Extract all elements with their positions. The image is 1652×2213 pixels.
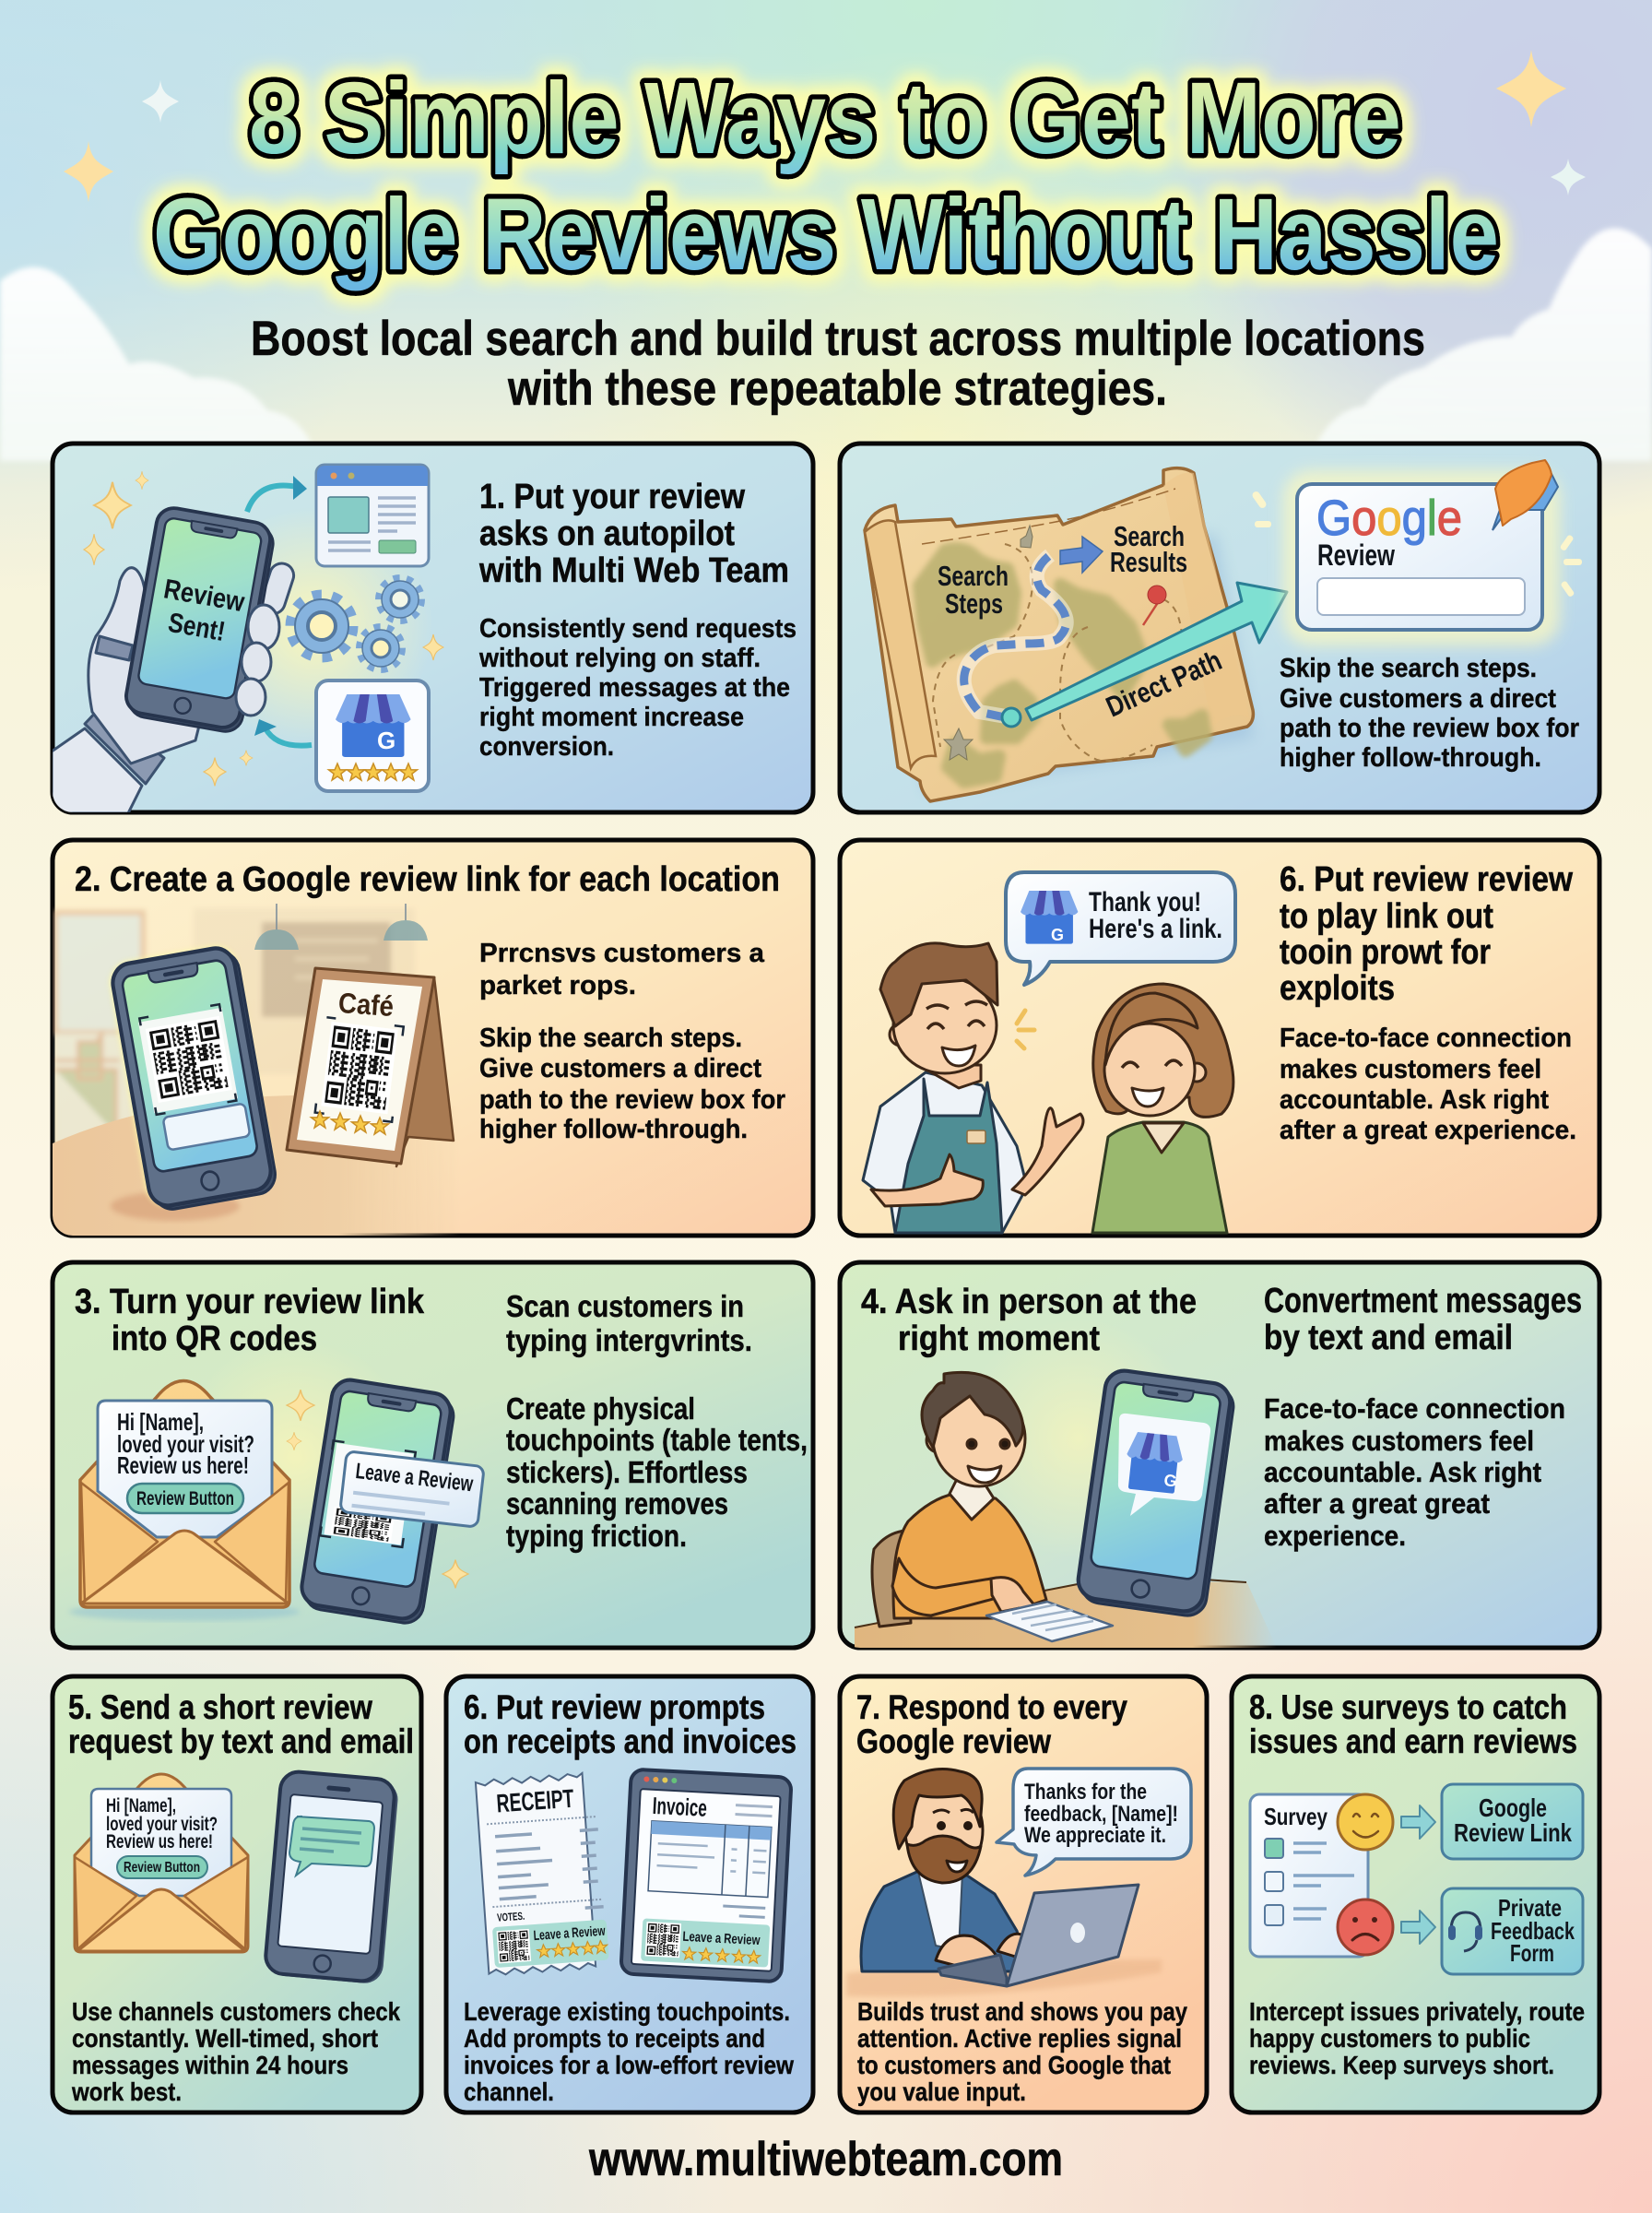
illustration: robot hand with phone, gears and profile cards <box>52 465 443 813</box>
heading: with Multi Web Team <box>478 551 789 590</box>
panel background <box>840 1676 1207 2112</box>
map path dashed lines <box>933 544 1182 761</box>
panel: 8 surveys <box>1232 1676 1599 2112</box>
heading: 4. Ask in person at the <box>861 1283 1197 1321</box>
subtitle: Boost local search and build trust across multiple locations <box>251 312 1425 366</box>
panel background <box>446 1676 813 2112</box>
body text: Builds trust and shows you pay <box>857 1997 1187 2026</box>
body text: Skip the search steps. <box>479 1024 742 1053</box>
subtitle: with these repeatable strategies. <box>507 361 1167 416</box>
illustration: treasure map <box>865 468 1254 801</box>
illustration: email envelope <box>69 1381 300 1621</box>
panel background <box>53 444 813 812</box>
body text: Prrcnsvs customers a <box>479 939 765 968</box>
body text: Create physical <box>506 1391 695 1426</box>
icon: business profile card: G <box>377 727 395 754</box>
description: experience. <box>1264 1520 1406 1552</box>
card: google review: Google <box>1316 491 1462 546</box>
body text: channel. <box>464 2077 554 2106</box>
body text: attention. Active replies signal <box>857 2024 1182 2053</box>
body text: right moment increase <box>479 703 744 732</box>
body text: Consistently send requests <box>479 614 796 644</box>
icon: sparkles <box>287 1390 468 1588</box>
speech bubble: We appreciate it. <box>1024 1823 1166 1848</box>
illustration: envelope: loved your visit? <box>106 1814 218 1835</box>
illustration: receipt <box>476 1772 609 1976</box>
panel background <box>53 840 813 1236</box>
icon: sad face <box>1338 1899 1393 1955</box>
box: private feedback form <box>1442 1888 1583 1974</box>
body text: Triggered messages at the <box>479 673 790 703</box>
speech bubble: Thanks for the <box>1024 1780 1147 1805</box>
body text: happy customers to public <box>1249 2024 1530 2053</box>
panel: direct path map <box>840 444 1599 812</box>
heading: Google review <box>856 1722 1051 1760</box>
box: private feedback form: Form <box>1510 1939 1554 1967</box>
heading: into QR codes <box>112 1320 317 1358</box>
heading: to play link out <box>1280 897 1493 936</box>
subtitle <box>251 312 1425 416</box>
icon: phone with qr code <box>106 942 278 1213</box>
heading: on receipts and invoices <box>464 1722 796 1760</box>
illustration: survey card <box>1250 1794 1368 1957</box>
icon: browser window <box>316 465 429 566</box>
icon: robot arm <box>52 561 297 813</box>
body text: reviews. Keep surveys short. <box>1249 2051 1554 2079</box>
body text: invoices for a low-effort review <box>464 2051 794 2079</box>
body text: Intercept issues privately, route <box>1249 1997 1585 2026</box>
body text: higher follow-through. <box>479 1115 748 1144</box>
table <box>855 1581 1277 1648</box>
heading: 3. Turn your review link <box>75 1283 425 1321</box>
body text: Scan customers in <box>506 1289 744 1323</box>
icon: table tent with qr code: Café <box>337 987 395 1023</box>
illustration: email envelope: loved your visit? <box>117 1430 254 1458</box>
subheading <box>1264 1282 1582 1357</box>
description: accountable. Ask right <box>1264 1456 1541 1488</box>
map labels: Search <box>1114 520 1185 552</box>
icon: happy face <box>1338 1794 1393 1850</box>
speech bubble: Thank you! <box>1089 887 1201 917</box>
body text <box>478 614 796 762</box>
speech bubble: G <box>1051 926 1064 944</box>
heading: 6. Put review prompts <box>464 1688 765 1726</box>
body text <box>1280 1024 1576 1145</box>
body text: typing intergvrints. <box>506 1323 752 1357</box>
icon: sparkles <box>84 471 443 786</box>
body text: to customers and Google that <box>857 2051 1171 2079</box>
illustration: cafe scene <box>53 904 461 1237</box>
body text <box>71 1997 400 2106</box>
icon: table tent with qr code <box>287 968 454 1166</box>
description: makes customers feel <box>1264 1425 1534 1457</box>
arrow: to feedback form <box>1401 1911 1435 1944</box>
panel: 3 qr codes <box>53 1262 813 1648</box>
heading <box>478 478 789 590</box>
icon: pendant lamps <box>254 904 428 950</box>
description <box>1264 1392 1565 1552</box>
body text: messages within 24 hours <box>72 2051 348 2079</box>
body text: path to the review box for <box>1280 714 1579 743</box>
figure: customer at table <box>872 1372 1046 1627</box>
icon: robot fingers <box>236 605 279 716</box>
card: google review <box>1251 460 1582 645</box>
body text: Give customers a direct <box>479 1054 761 1083</box>
description: after a great great <box>1264 1487 1490 1520</box>
speech bubble <box>1006 872 1235 985</box>
illustration: email envelope: Review Button <box>136 1488 234 1509</box>
figure: customer <box>1092 984 1233 1233</box>
illustration: envelope: Review Button <box>124 1860 200 1876</box>
map landmarks <box>944 526 1032 760</box>
body text: makes customers feel <box>1280 1055 1541 1084</box>
body text: touchpoints (table tents, <box>506 1423 808 1457</box>
speech bubble: feedback, [Name]! <box>1024 1802 1178 1827</box>
heading <box>1249 1688 1577 1760</box>
body text: Add prompts to receipts and <box>464 2024 765 2053</box>
icon: arrows <box>247 486 312 746</box>
illustration: envelope: Hi [Name], <box>106 1795 176 1817</box>
body text: scanning removes <box>506 1486 728 1521</box>
panel background <box>840 1262 1599 1648</box>
figure: staff member <box>863 943 1083 1233</box>
speech bubble <box>997 1769 1191 1876</box>
phone text: Sent! <box>166 608 228 647</box>
body text: parket rops. <box>479 971 636 1000</box>
panel: 2 review link per location <box>53 840 813 1237</box>
panel background <box>53 1262 813 1648</box>
body text: Use channels customers check <box>72 1997 400 2026</box>
panel: 1 autopilot <box>52 444 813 813</box>
illustration: envelope: Review us here! <box>106 1831 213 1852</box>
illustration: receipt: RECEIPT <box>495 1784 574 1818</box>
panel: 6 receipts and invoices <box>446 1676 813 2112</box>
panel background <box>840 840 1599 1236</box>
map labels: Search <box>938 560 1009 592</box>
heading <box>464 1688 796 1760</box>
illustration: tablet invoice: Leave a Review <box>682 1929 761 1948</box>
body text: Face-to-face connection <box>1280 1024 1572 1053</box>
body text <box>464 1997 794 2106</box>
panel: ask in person illustration with heading <box>840 840 1599 1236</box>
title <box>153 62 1499 291</box>
heading: right moment <box>898 1320 1100 1358</box>
illustration: receipt: VOTES. <box>497 1910 525 1924</box>
illustration: owner at laptop <box>846 1769 1162 1996</box>
body text <box>1280 654 1579 773</box>
icon: phone with business card <box>1075 1368 1236 1618</box>
icon: laptop <box>938 1885 1139 1986</box>
panel: 4 ask in person <box>840 1262 1599 1648</box>
speech bubble: Here's a link. <box>1089 914 1222 944</box>
box: google review link <box>1442 1784 1583 1859</box>
body text: typing friction. <box>506 1519 687 1553</box>
body text: stickers). Effortless <box>506 1455 748 1489</box>
map labels <box>938 520 1226 723</box>
box: private feedback form: Feedback <box>1491 1917 1575 1945</box>
box: private feedback form: Private <box>1498 1894 1562 1922</box>
heading: request by text and email <box>68 1722 414 1760</box>
panel background <box>1232 1676 1599 2112</box>
icon: accent ticks <box>1017 1011 1034 1048</box>
heading: 8. Use surveys to catch <box>1249 1688 1567 1726</box>
footer url: www.multiwebteam.com <box>588 2133 1063 2186</box>
body text: accountable. Ask right <box>1280 1085 1549 1115</box>
phone text <box>164 579 245 641</box>
heading <box>75 1283 425 1358</box>
map pin <box>1143 586 1166 625</box>
heading: exploits <box>1280 969 1395 1008</box>
map labels: Results <box>1110 546 1187 578</box>
illustration: receipt: Leave a Review <box>533 1923 606 1944</box>
map land <box>919 549 1206 782</box>
arrow: direct path <box>1002 583 1287 727</box>
body text: Leverage existing touchpoints. <box>464 1997 790 2026</box>
illustration: phone with review card <box>299 1378 484 1626</box>
body text: higher follow-through. <box>1280 743 1541 773</box>
body text: constantly. Well-timed, short <box>72 2024 378 2053</box>
heading: 5. Send a short review <box>68 1688 372 1726</box>
illustration: email envelope: Hi [Name], <box>117 1408 204 1436</box>
illustration: tablet invoice: Invoice <box>652 1792 708 1822</box>
body text <box>479 939 785 1144</box>
body text: you value input. <box>857 2077 1026 2106</box>
illustration: staff and customer <box>863 872 1235 1233</box>
body text: Give customers a direct <box>1280 684 1556 714</box>
body text: after a great experience. <box>1280 1116 1576 1145</box>
illustration: tablet invoice <box>620 1769 792 1982</box>
body text <box>506 1289 808 1553</box>
icon: title sparkles <box>64 50 1586 202</box>
body text: work best. <box>71 2077 182 2106</box>
card: google review: Review <box>1317 538 1395 572</box>
phone text: Review <box>161 574 247 618</box>
heading: tooin prowt for <box>1280 933 1491 972</box>
heading: issues and earn reviews <box>1249 1722 1577 1760</box>
heading: 7. Respond to every <box>856 1688 1127 1726</box>
subheading: Convertment messages <box>1264 1282 1582 1320</box>
icon: business profile card <box>316 680 429 791</box>
description: Face-to-face connection <box>1264 1392 1565 1425</box>
box: google review link: Google <box>1479 1793 1547 1822</box>
heading: 6. Put review review <box>1280 860 1573 899</box>
illustration: envelope <box>75 1774 248 1952</box>
illustration: survey card: Survey <box>1264 1803 1328 1830</box>
heading: 1. Put your review <box>479 478 745 516</box>
title: Google Reviews Without Hassle <box>153 178 1499 291</box>
subheading: by text and email <box>1264 1319 1513 1357</box>
illustration: email envelope: Review us here! <box>117 1451 249 1479</box>
heading <box>856 1688 1127 1760</box>
icon: paper on table <box>986 1602 1113 1641</box>
illustration: phone with chat bubble <box>264 1770 399 1984</box>
heading: asks on autopilot <box>479 515 735 553</box>
box: google review link: Review Link <box>1454 1818 1572 1847</box>
map labels: Steps <box>945 587 1003 620</box>
panel background <box>53 1676 421 2112</box>
map labels: Direct Path <box>1102 644 1226 723</box>
panel background <box>840 444 1599 812</box>
panel: 7 respond <box>840 1676 1207 2112</box>
title: 8 Simple Ways to Get More <box>249 62 1401 175</box>
icon: phone <box>123 505 277 734</box>
heading <box>1280 860 1573 1008</box>
body text: without relying on staff. <box>478 644 761 673</box>
heading <box>68 1688 414 1760</box>
icon: phone with business card: G <box>1163 1471 1178 1490</box>
body text <box>1249 1997 1585 2079</box>
body text: conversion. <box>479 732 614 762</box>
body text: path to the review box for <box>479 1085 785 1115</box>
body text: Skip the search steps. <box>1280 654 1537 683</box>
panel: 5 text and email <box>53 1676 421 2112</box>
illustration: seated person and phone <box>855 1368 1277 1648</box>
heading: 2. Create a Google review link for each location <box>75 860 780 899</box>
illustration: phone with review card: Leave a Review <box>354 1459 475 1497</box>
arrow: to review link <box>1401 1805 1435 1839</box>
icon: gears <box>290 578 421 669</box>
body text <box>857 1997 1187 2106</box>
heading <box>861 1283 1197 1358</box>
